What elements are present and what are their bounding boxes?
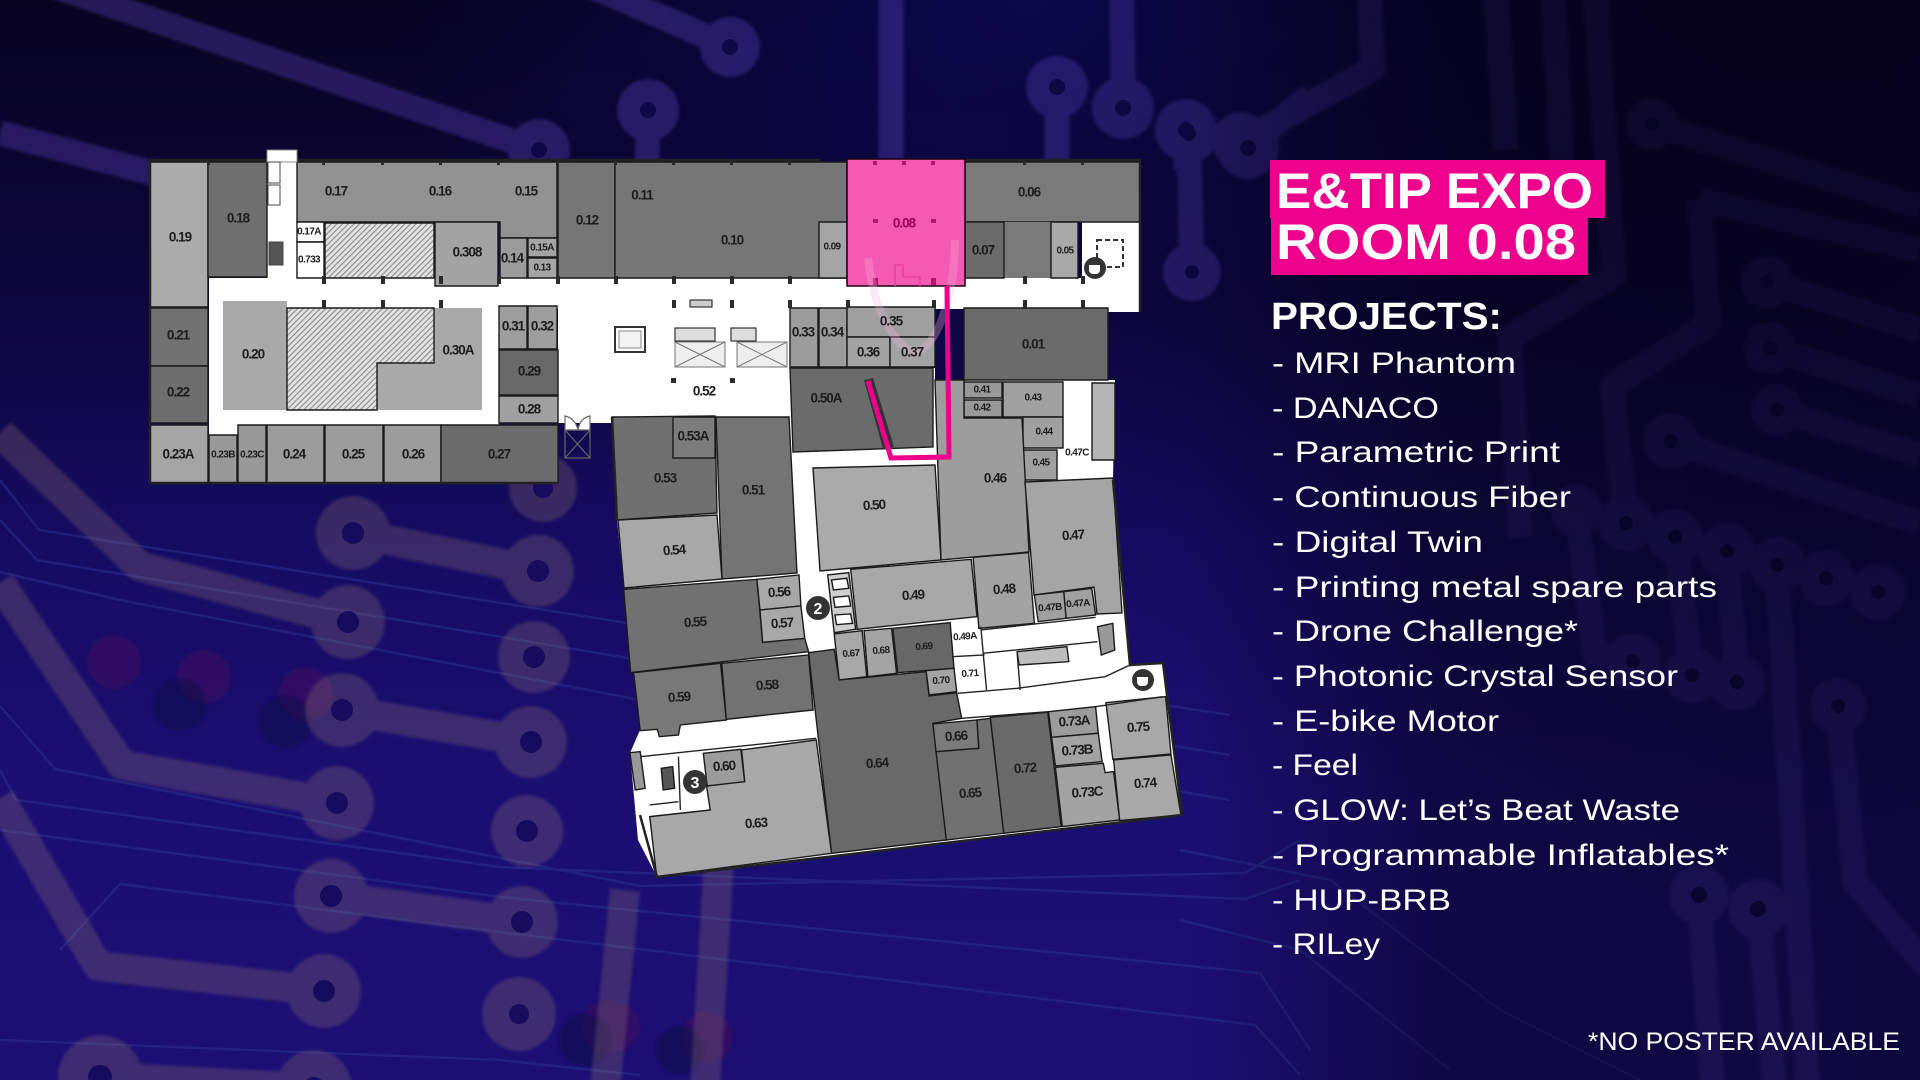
route to room 0.08	[868, 286, 949, 458]
project list: - Digital Twin	[1272, 526, 1483, 559]
room number labels: 0.20	[242, 346, 265, 362]
title line 2: ROOM 0.08	[1276, 214, 1576, 270]
room number labels: 0.47A	[1066, 598, 1091, 610]
room number labels: 0.31	[502, 318, 526, 334]
room number labels: 0.25	[342, 446, 366, 462]
icon: coffee south-east	[1132, 669, 1154, 691]
room number labels: 0.73B	[1061, 741, 1094, 759]
room number labels: 0.44	[1035, 426, 1054, 438]
room number labels: 0.49	[901, 587, 925, 603]
room number labels: 0.36	[857, 344, 881, 360]
project list: - GLOW: Let’s Beat Waste	[1272, 794, 1680, 827]
white corridors base	[209, 150, 1182, 877]
room number labels: 0.73A	[1058, 712, 1091, 730]
east wing rooms	[790, 162, 1140, 480]
room number labels: 0.15A	[530, 242, 554, 254]
outer walls	[150, 160, 1182, 877]
room number labels: 0.15	[515, 184, 539, 198]
room number labels: 0.21	[167, 328, 191, 342]
room number labels: 0.19	[169, 230, 192, 244]
room number labels: 0.74	[1133, 775, 1158, 791]
room number labels: 0.23C	[240, 450, 264, 460]
outside lift box	[565, 416, 590, 458]
room number labels: 0.72	[1013, 760, 1037, 776]
room number labels: 0.55	[683, 614, 708, 630]
room number labels: 0.16	[429, 184, 453, 198]
project list: - Parametric Print	[1272, 436, 1561, 469]
room number labels: 0.26	[402, 446, 426, 462]
project list: - Printing metal spare parts	[1272, 571, 1717, 604]
circuit traces, lower left	[0, 433, 719, 1080]
room number labels: 0.30A	[442, 342, 475, 358]
project list: - MRI Phantom	[1272, 347, 1516, 380]
room number labels: 0.37	[901, 344, 924, 360]
room number labels: 0.07	[972, 242, 995, 258]
room number labels: 0.54	[662, 542, 687, 558]
room number labels: 0.14	[501, 250, 525, 266]
room number labels: 0.34	[821, 324, 845, 340]
room number labels: 0.48	[992, 581, 1017, 597]
floor plan	[150, 150, 1182, 877]
icon: stair core 2: 2	[814, 601, 823, 618]
project list: - DANACO	[1272, 392, 1439, 425]
room number labels: 0.27	[488, 446, 511, 462]
room number labels: 0.70	[932, 675, 951, 687]
title highlight	[1270, 160, 1605, 275]
room number labels: 0.42	[973, 402, 992, 414]
room number labels: 0.66	[944, 728, 969, 744]
room number labels: 0.11	[631, 188, 654, 202]
project list: - RILey	[1272, 928, 1380, 961]
room number labels: 0.05	[1056, 246, 1075, 256]
freight lift X boxes	[675, 342, 787, 367]
structural columns	[207, 160, 1085, 383]
title block	[1270, 160, 1605, 275]
project list: - HUP-BRB	[1272, 884, 1451, 917]
highlighted room 0.08	[847, 159, 965, 286]
room number labels: 0.47B	[1038, 602, 1063, 614]
project list: - Continuous Fiber	[1272, 481, 1571, 514]
room number labels: 0.53	[654, 470, 678, 486]
room number labels: 0.13	[533, 262, 552, 274]
lift box	[615, 327, 645, 352]
room number labels: 0.41	[973, 384, 992, 396]
west wing rooms	[150, 162, 847, 483]
project list: - Feel	[1272, 749, 1358, 782]
room number labels: 0.45	[1032, 458, 1051, 468]
room number labels: 0.63	[744, 815, 769, 831]
project list	[1272, 347, 1729, 961]
room number labels: 0.53A	[677, 428, 710, 444]
project list: - E-bike Motor	[1272, 705, 1499, 738]
title line 1: E&TIP EXPO	[1276, 163, 1593, 219]
icon: stair core 2	[806, 596, 830, 620]
room number labels: 0.50	[862, 497, 886, 513]
room number labels: 0.64	[865, 755, 890, 771]
room number labels: 0.67	[842, 648, 861, 660]
room number labels: 0.69	[915, 641, 934, 653]
room number labels: 0.24	[283, 446, 307, 462]
south wing interior walls	[640, 617, 1163, 810]
room number labels: 0.17	[325, 184, 348, 198]
room number labels: 0.33	[792, 324, 816, 340]
room number labels: 0.06	[1018, 184, 1042, 200]
toilet blocks	[675, 300, 756, 341]
room number labels: 0.73C	[1071, 783, 1104, 801]
room number labels: 0.75	[1126, 719, 1151, 735]
room number labels: 0.733	[298, 254, 321, 266]
room number labels: 0.28	[518, 402, 542, 416]
room number labels: 0.57	[770, 615, 794, 631]
room number labels: 0.52	[693, 384, 716, 398]
room number labels: 0.56	[767, 584, 792, 600]
room number labels: 0.51	[742, 482, 766, 498]
room number labels: 0.08	[893, 216, 917, 230]
stair inside room 0.50A	[864, 378, 894, 449]
faint highlight arc	[868, 240, 955, 352]
project list: - Programmable Inflatables*	[1272, 839, 1729, 872]
room number labels: 0.35	[880, 314, 904, 328]
room number labels: 0.43	[1024, 392, 1043, 404]
icon: coffee north-east	[1084, 257, 1106, 279]
room number labels: 0.68	[872, 645, 891, 657]
room number labels: 0.47C	[1065, 448, 1089, 458]
room number labels: 0.01	[1022, 336, 1046, 352]
east stair core	[1097, 240, 1123, 267]
room number labels: 0.12	[576, 212, 599, 228]
room number labels: 0.09	[823, 242, 842, 252]
room number labels: 0.47	[1061, 527, 1085, 543]
icon: stair core 3: 3	[691, 775, 700, 792]
room number labels: 0.50A	[810, 390, 843, 406]
room number labels: 0.71	[961, 668, 980, 680]
project list: - Photonic Crystal Sensor	[1272, 660, 1678, 693]
room number labels	[162, 184, 1158, 831]
room number labels: 0.58	[755, 677, 780, 693]
room number labels: 0.17A	[297, 226, 321, 238]
room number labels: 0.22	[167, 384, 190, 400]
south wing rooms	[624, 553, 1181, 877]
room number labels: 0.18	[227, 210, 251, 226]
room number labels: 0.23A	[162, 446, 195, 462]
service core at the north stairs	[267, 150, 297, 265]
room number labels: 0.308	[453, 244, 483, 260]
room number labels: 0.59	[667, 689, 691, 705]
room number labels: 0.23B	[211, 450, 235, 460]
project list: - Drone Challenge*	[1272, 615, 1578, 648]
icon: stair core 3	[683, 770, 707, 794]
room number labels: 0.65	[958, 785, 983, 801]
room number labels: 0.46	[984, 470, 1008, 486]
room number labels: 0.60	[712, 758, 736, 774]
projects heading: PROJECTS:	[1271, 296, 1502, 338]
footnote: *NO POSTER AVAILABLE	[1588, 1028, 1900, 1056]
room number labels: 0.29	[518, 364, 541, 378]
central rooms	[612, 368, 1122, 614]
room number labels: 0.49A	[953, 631, 978, 643]
room number labels: 0.32	[531, 318, 554, 334]
room number labels: 0.10	[721, 232, 744, 248]
